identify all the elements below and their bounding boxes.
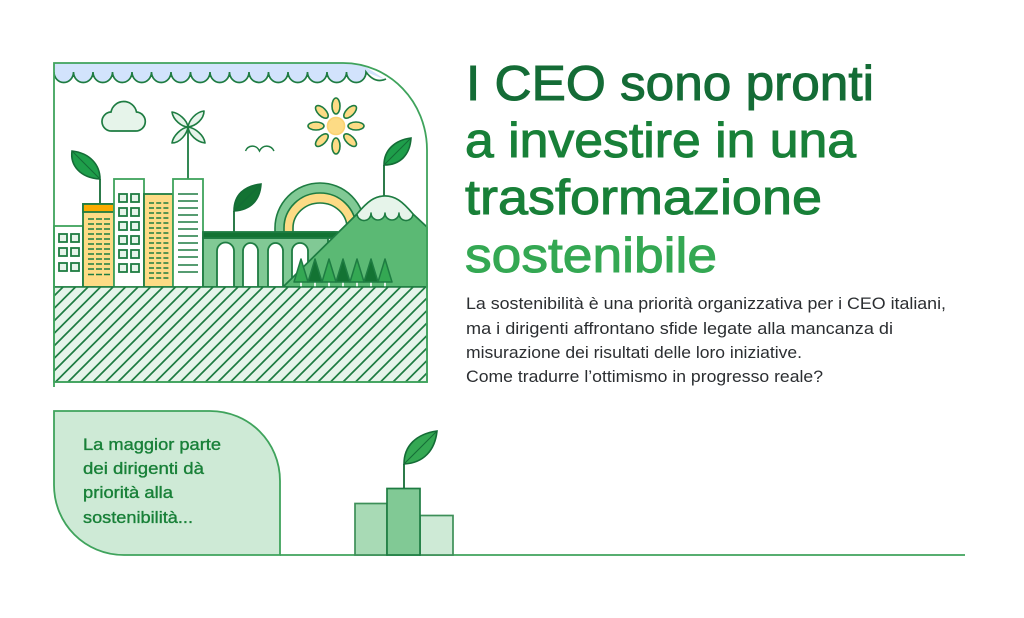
building 1 <box>54 226 83 287</box>
sky with scalloped clouds <box>54 63 386 82</box>
building 5 <box>173 179 203 287</box>
icon: wind turbine <box>172 111 205 179</box>
callout text: La maggior parte <box>83 436 221 454</box>
callout text: priorità alla <box>83 484 174 502</box>
hatched ground <box>54 287 427 382</box>
aqueduct <box>203 232 337 287</box>
building 4 <box>144 194 173 287</box>
icon: mountain leaf <box>384 138 411 196</box>
title: sostenibile <box>465 229 717 283</box>
title: a investire in una <box>465 114 857 168</box>
mountain snow cap <box>357 196 413 221</box>
panel: callout <box>54 411 280 555</box>
frame outline <box>54 63 427 387</box>
intro text block: Come tradurre l’ottimismo in progresso reale? <box>466 368 823 386</box>
intro text block: La sostenibilità è una priorità organizzativa per i CEO italiani, <box>466 295 946 313</box>
panel: city illustration <box>54 63 427 387</box>
intro text block <box>466 295 946 386</box>
baseline rule <box>280 554 965 556</box>
mountain <box>283 196 427 287</box>
icon: left leaf <box>72 151 100 204</box>
intro text block: ma i dirigenti affrontano sfide legate alla mancanza di <box>466 320 893 338</box>
icon: birds <box>246 146 274 151</box>
building 3 <box>114 179 144 287</box>
intro text block: misurazione dei risultati delle loro iniziative. <box>466 344 802 362</box>
rainbow <box>275 183 365 232</box>
row of trees <box>294 259 392 287</box>
title: trasformazione <box>465 171 822 225</box>
icon: chart leaf <box>404 431 437 488</box>
icon: sun <box>308 98 364 154</box>
callout text: dei dirigenti dà <box>83 460 205 478</box>
building 2 <box>83 204 114 287</box>
callout text: sostenibilità... <box>83 509 193 527</box>
icon: cloud <box>102 102 145 131</box>
callout text <box>83 436 221 527</box>
title <box>465 57 874 283</box>
icon: aqueduct leaf <box>234 184 261 232</box>
title: I CEO sono pronti <box>466 57 874 111</box>
bar chart with sprout <box>355 431 453 555</box>
